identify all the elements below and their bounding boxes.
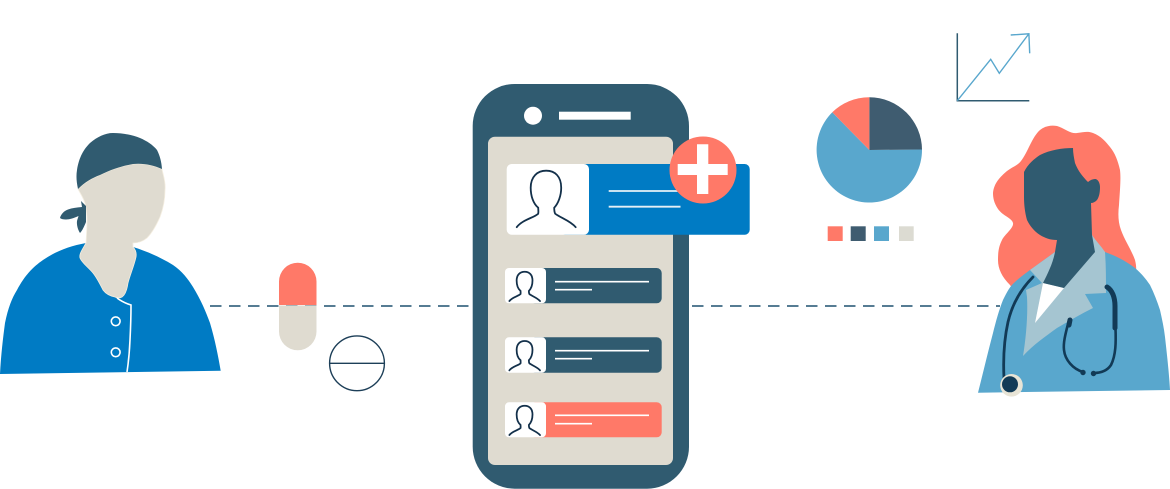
capsule bottom half bbox=[279, 306, 316, 350]
figure: doctor bbox=[978, 126, 1170, 397]
dashed connector: patient to phone bbox=[210, 305, 473, 307]
row text line 2 bbox=[555, 423, 592, 425]
row panel bbox=[530, 268, 662, 303]
row text line 1 bbox=[555, 281, 649, 283]
card avatar tile bbox=[507, 164, 589, 235]
row panel bbox=[530, 337, 662, 373]
phone screen bbox=[488, 137, 673, 465]
line chart: rising trend bbox=[957, 33, 1030, 101]
row text line 1 bbox=[555, 350, 649, 352]
stethoscope bbox=[1004, 277, 1116, 378]
chart axes bbox=[957, 33, 1029, 101]
icon: plus badge bbox=[670, 136, 736, 204]
gown button top bbox=[111, 317, 120, 326]
capsule top half bbox=[279, 263, 316, 305]
stethoscope tube join bbox=[1069, 320, 1070, 325]
figure: patient bbox=[0, 133, 221, 374]
stethoscope thick right tube bbox=[1107, 287, 1115, 328]
trend line with arrow bbox=[957, 34, 1030, 101]
stethoscope chest piece bbox=[1000, 374, 1023, 397]
card blue panel bbox=[560, 164, 750, 235]
row panel bbox=[530, 402, 662, 437]
list row 1 bbox=[505, 268, 662, 303]
avatar outline bbox=[517, 171, 576, 227]
row avatar bbox=[509, 272, 540, 301]
row avatar tile bbox=[505, 268, 546, 303]
icon: capsule pill bbox=[279, 263, 316, 350]
doctor coat bbox=[978, 240, 1170, 393]
stethoscope ear tip right bbox=[1091, 371, 1096, 376]
stethoscope lower left tube bbox=[1064, 320, 1083, 372]
row avatar bbox=[509, 341, 540, 370]
phone body bbox=[473, 84, 689, 489]
pie slice: coral bbox=[832, 97, 869, 150]
bandana knot tails bbox=[60, 201, 86, 233]
row text line 2 bbox=[555, 358, 592, 360]
doctor lapels bbox=[1023, 235, 1106, 356]
pie legend swatches bbox=[828, 226, 914, 241]
doctor shirt bbox=[1035, 283, 1064, 323]
stethoscope lower right tube bbox=[1094, 328, 1116, 373]
pie slice: dark bbox=[869, 97, 922, 150]
featured profile card bbox=[507, 164, 750, 235]
row avatar tile bbox=[505, 337, 546, 373]
stethoscope ear tip left bbox=[1080, 370, 1086, 375]
row avatar bbox=[509, 406, 540, 435]
phone speaker bbox=[559, 112, 631, 120]
list row 3 bbox=[505, 402, 662, 437]
doctor hair bbox=[993, 126, 1136, 300]
phone camera bbox=[524, 107, 542, 125]
patient bandana bbox=[76, 133, 162, 189]
row text line 1 bbox=[555, 414, 649, 416]
icon: round tablet bbox=[330, 336, 384, 391]
gown button bottom bbox=[111, 348, 120, 357]
list row 2 bbox=[505, 337, 662, 373]
card text line 2 bbox=[609, 206, 680, 208]
gown placket line bbox=[117, 298, 131, 372]
stethoscope main tube bbox=[1004, 277, 1033, 378]
pie chart bbox=[817, 97, 922, 203]
card text line 1 bbox=[609, 190, 680, 192]
doctor head and neck bbox=[1024, 148, 1100, 288]
patient gown bbox=[0, 243, 221, 374]
row avatar tile bbox=[505, 402, 546, 437]
dashed connector: phone to doctor bbox=[692, 305, 1000, 307]
smartphone bbox=[473, 84, 750, 489]
pie slice: blue bbox=[817, 112, 922, 203]
patient head and neck bbox=[78, 164, 165, 298]
row text line 2 bbox=[555, 289, 592, 291]
